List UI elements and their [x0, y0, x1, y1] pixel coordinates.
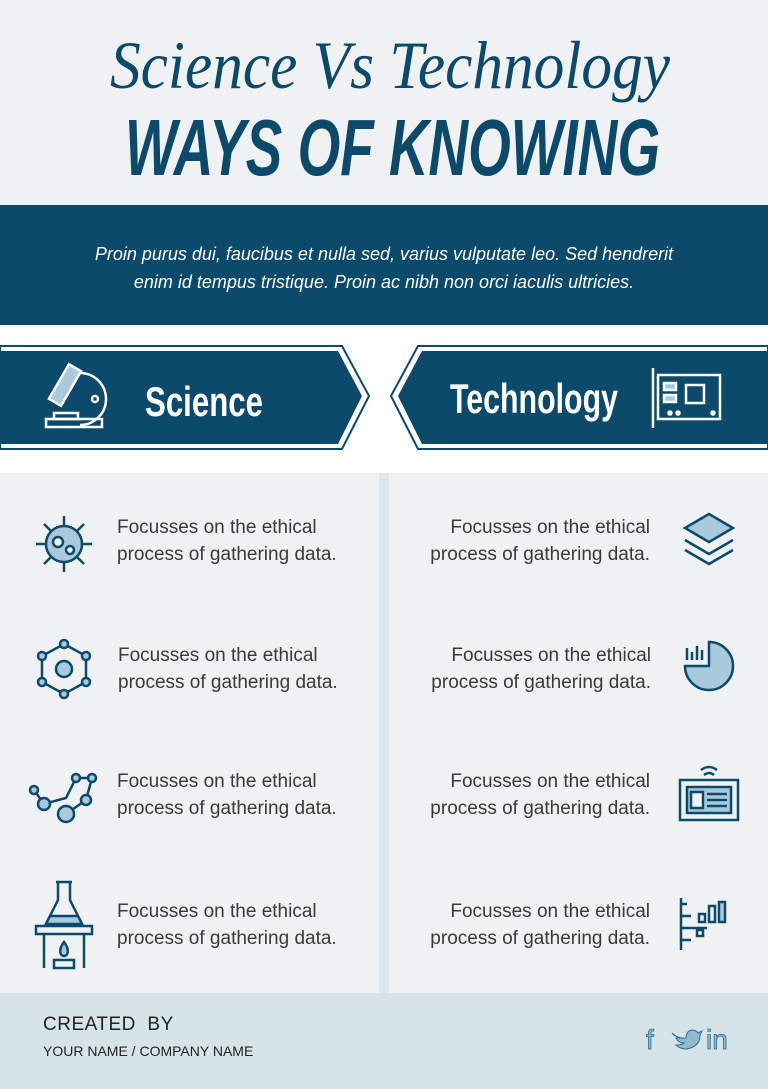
- title script: Science Vs Technology: [110, 27, 671, 103]
- name line: YOUR NAME / COMPANY NAME: [43, 1043, 253, 1059]
- banner: technology: [390, 345, 768, 450]
- icon: chain: [28, 772, 98, 824]
- icon: layers: [682, 512, 736, 566]
- intro band: [0, 205, 768, 325]
- intro text: [95, 244, 674, 292]
- text: science 2: Focusses on the ethical: [118, 645, 318, 666]
- footer: [0, 993, 768, 1089]
- text: tech 3: process of gathering data.: [430, 798, 650, 819]
- technology rows: [430, 512, 740, 950]
- text: science 1: process of gathering data.: [117, 544, 337, 565]
- title block: [110, 27, 671, 192]
- intro text: Proin purus dui, faucibus et nulla sed, varius vulputate leo. Sed hendrerit: [95, 244, 673, 264]
- text: science 4: Focusses on the ethical: [117, 901, 317, 922]
- social icons: in: [706, 1024, 728, 1055]
- icon: bar chart: [680, 898, 726, 950]
- text: tech 1: [430, 517, 650, 565]
- social icons: f: [646, 1024, 654, 1055]
- text: tech 1: Focusses on the ethical: [450, 517, 650, 538]
- text: science 2: process of gathering data.: [118, 672, 338, 693]
- icon: pie chart: [684, 640, 734, 692]
- created by: CREATED BY: [43, 1014, 174, 1035]
- text: science 1: Focusses on the ethical: [117, 517, 317, 538]
- social icons: [646, 1024, 728, 1055]
- text: tech 4: Focusses on the ethical: [450, 901, 650, 922]
- text: science 3: process of gathering data.: [117, 798, 337, 819]
- icon: flask burner: [34, 880, 94, 970]
- text: tech 4: [430, 901, 650, 949]
- divider: [379, 473, 389, 993]
- icon: molecule: [36, 638, 92, 700]
- text: tech 4: process of gathering data.: [430, 928, 650, 949]
- icon: circuit card: [653, 368, 720, 428]
- text: tech 2: process of gathering data.: [431, 672, 651, 693]
- text: science 4: process of gathering data.: [117, 928, 337, 949]
- icon: microscope: [46, 364, 106, 427]
- text: tech 2: Focusses on the ethical: [451, 645, 651, 666]
- header white area: [0, 325, 768, 473]
- icon: virus: [36, 516, 92, 572]
- text: science 4: [117, 901, 337, 949]
- text: science 3: Focusses on the ethical: [117, 771, 317, 792]
- label: science: Science: [145, 378, 263, 425]
- text: tech 3: Focusses on the ethical: [450, 771, 650, 792]
- banner: science: [0, 345, 370, 450]
- science rows: [28, 516, 338, 970]
- text: tech 3: [430, 771, 650, 819]
- text: science 2: [118, 645, 338, 693]
- text: science 3: [117, 771, 337, 819]
- icon: screen: [678, 766, 740, 822]
- text: tech 2: [431, 645, 651, 693]
- label: technology: Technology: [450, 375, 618, 422]
- text: tech 1: process of gathering data.: [430, 544, 650, 565]
- text: science 1: [117, 517, 337, 565]
- intro text: enim id tempus tristique. Proin ac nibh non orci iaculis ultricies.: [134, 272, 634, 292]
